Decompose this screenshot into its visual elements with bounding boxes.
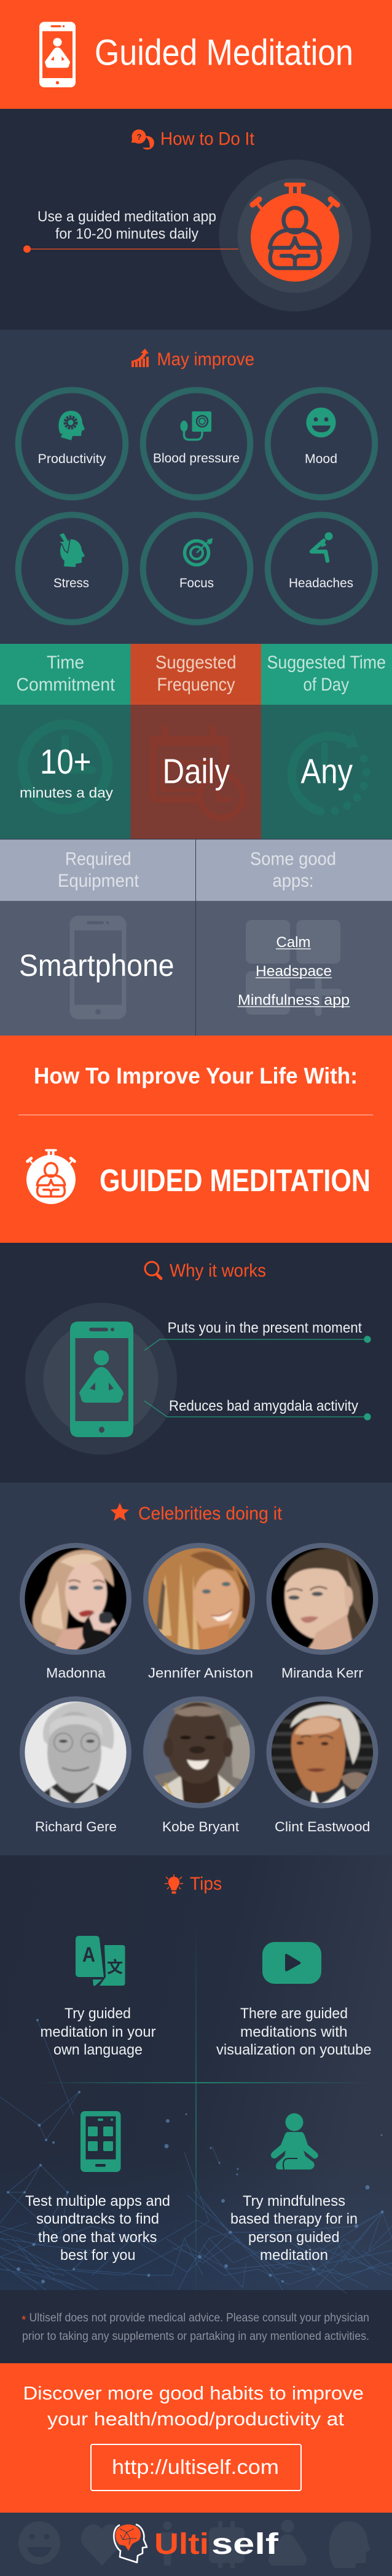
tip: test apps: Test multiple apps and	[25, 2193, 170, 2209]
icon: star	[111, 1503, 129, 1521]
title: Guided Meditation	[95, 32, 353, 73]
callout: amygdala: Reduces bad amygdala activity	[169, 1398, 358, 1414]
tip: youtube: meditations with	[240, 2024, 348, 2040]
heading: suggested time of day: of Day	[304, 675, 349, 695]
tip: own language	[41, 1936, 156, 2058]
benefit: stress: Stress	[53, 576, 89, 590]
icon: faint phone	[70, 916, 127, 1020]
app links: Calm	[276, 934, 311, 951]
callout: present moment	[144, 1320, 371, 1350]
portrait: Miranda Kerr	[267, 1543, 378, 1655]
cta text: your health/mood/productivity at	[47, 2408, 344, 2430]
panel: suggested time of day	[261, 644, 392, 839]
benefit: blood pressure: Blood pressure	[153, 451, 240, 466]
value: daily: Daily	[162, 751, 230, 791]
heading: may improve: May improve	[157, 349, 254, 370]
callout: present moment: Puts you in the present moment	[168, 1320, 362, 1336]
celebrity names: Clint Eastwood	[275, 1819, 370, 1834]
benefit: mood	[268, 390, 375, 497]
tip: youtube: There are guided	[240, 2005, 348, 2022]
icon: rising chart	[131, 349, 149, 367]
header banner	[0, 0, 392, 109]
tip: test apps	[25, 2111, 170, 2264]
celebrity names: Richard Gere	[35, 1819, 117, 1834]
starfield network background	[0, 2020, 392, 2294]
heading: some good apps: apps:	[273, 871, 313, 891]
instruction text: for 10-20 minutes daily	[55, 226, 198, 242]
tip: youtube	[216, 1942, 371, 2058]
value: smartphone: Smartphone	[19, 948, 174, 983]
value: 10+: 10+	[40, 742, 91, 782]
tip: in-person therapy: meditation	[260, 2247, 328, 2264]
heading: tips: Tips	[190, 1874, 222, 1894]
icon: faint app grid	[246, 920, 342, 1016]
tip: in-person therapy: Try mindfulness	[243, 2193, 345, 2209]
icon: question bubbles: ?	[136, 132, 141, 141]
url box	[91, 2444, 301, 2491]
concentric circles	[219, 160, 371, 311]
panel: tips	[0, 1855, 392, 2363]
disclaimer: Ultiself does not provide medical advice. Please consult your physician	[29, 2312, 369, 2324]
icon: head with gear	[58, 411, 85, 440]
icon: bulb	[165, 1874, 183, 1894]
panel: required equipment	[0, 839, 195, 1036]
benefit: mood: Mood	[305, 451, 337, 466]
logo: ultiself: Ulti	[154, 2528, 209, 2561]
instruction text	[37, 208, 216, 242]
heading: how to do it: How to Do It	[160, 129, 255, 149]
heading: time commitment	[16, 652, 116, 695]
icon: play button	[262, 1942, 321, 1984]
logo: ultiself: self	[211, 2528, 279, 2561]
benefit: headaches	[268, 515, 375, 622]
panel: footer	[0, 2513, 392, 2576]
panel: how to do it	[0, 109, 392, 330]
connector line with dot	[23, 245, 238, 253]
heading: required equipment: Required	[65, 849, 131, 870]
tip: in-person therapy: person guided	[248, 2229, 339, 2246]
icon: phone with apps	[80, 2111, 120, 2172]
icon: translate: A	[82, 1943, 95, 1967]
celebrity names	[35, 1665, 370, 1834]
banner heading: How To Improve Your Life With:	[34, 1063, 358, 1088]
tip: own language: meditation in your	[41, 2024, 156, 2040]
heading: suggested frequency: Suggested	[155, 652, 236, 673]
icon: faint circular arrow	[292, 732, 366, 811]
icon: translate: 文	[107, 1955, 123, 1978]
portrait: Richard Gere	[20, 1696, 131, 1808]
cta text: Discover more good habits to improve	[23, 2382, 364, 2404]
icon: meditating person	[271, 2113, 318, 2170]
panel: how to improve banner	[0, 1036, 392, 1243]
icon: blood pressure cuff	[181, 411, 211, 440]
disclaimer	[22, 2312, 369, 2343]
icon: phone with meditator	[70, 1322, 133, 1437]
benefit: focus: Focus	[179, 576, 214, 590]
heading: time commitment: Commitment	[16, 675, 116, 695]
tip: test apps: the one that works	[38, 2229, 157, 2246]
benefit: productivity: Productivity	[38, 451, 106, 466]
instruction text: Use a guided meditation app	[37, 208, 216, 225]
app links: Headspace	[256, 963, 332, 980]
heading: required equipment: Equipment	[58, 871, 139, 891]
heading: suggested frequency: Frequency	[157, 675, 235, 695]
panel: why it works	[0, 1243, 392, 1483]
panel: suggested frequency	[130, 644, 261, 839]
panel: call to action	[0, 2363, 392, 2513]
tip: youtube: visualization on youtube	[216, 2042, 371, 2058]
caption: minutes a day: minutes a day	[20, 785, 114, 801]
app links	[237, 934, 350, 1009]
icon: stopwatch meditator	[251, 183, 339, 282]
benefit: headaches: Headaches	[289, 576, 353, 590]
panel: some good apps	[195, 839, 392, 1036]
benefit: productivity	[18, 390, 125, 497]
icon: faint clock	[23, 724, 108, 809]
faint background icons	[18, 2520, 370, 2568]
icon: head with lightning	[58, 533, 85, 567]
icon: smiley	[306, 408, 335, 437]
portrait: Jennifer Aniston	[143, 1543, 255, 1655]
logo: ultiself	[114, 2524, 279, 2562]
benefit: stress	[18, 515, 125, 622]
cta text	[23, 2382, 364, 2430]
heading: why it works: Why it works	[170, 1261, 266, 1281]
celebrity names: Madonna	[46, 1665, 106, 1681]
portrait: Kobe Bryant	[143, 1696, 255, 1808]
icon: translate	[76, 1936, 125, 1986]
panel: time commitment	[0, 644, 130, 839]
tip: in-person therapy	[230, 2113, 358, 2264]
concentric circles	[25, 1302, 177, 1455]
icon: person holding head	[312, 533, 333, 561]
tip: test apps: soundtracks to find	[36, 2211, 159, 2227]
icon: faint calendar and clock	[150, 727, 243, 818]
benefit: blood pressure	[143, 390, 250, 497]
portrait: Madonna	[20, 1543, 131, 1655]
heading: required equipment	[58, 849, 139, 891]
benefit: focus	[143, 515, 250, 622]
heading: some good apps: Some good	[250, 849, 336, 870]
icon: white stopwatch	[26, 1149, 76, 1204]
heading: suggested frequency	[155, 652, 236, 695]
icon: phone with meditator	[39, 22, 76, 87]
tip: in-person therapy: based therapy for in	[230, 2211, 358, 2227]
callout: amygdala	[144, 1398, 371, 1421]
celebrity names: Jennifer Aniston	[148, 1665, 253, 1681]
value: any: Any	[301, 751, 353, 791]
icon: magnifier	[145, 1262, 161, 1278]
panel: may improve	[0, 330, 392, 644]
heading: celebrities: Celebrities doing it	[138, 1504, 283, 1524]
portrait: Clint Eastwood	[267, 1696, 378, 1808]
network nodes	[7, 2019, 383, 2283]
heading: time commitment: Time	[47, 652, 84, 673]
celebrity names: Miranda Kerr	[281, 1665, 364, 1681]
url box: http://ultiself.com	[112, 2455, 279, 2478]
tip: own language: Try guided	[65, 2005, 131, 2022]
heading: some good apps	[250, 849, 336, 891]
disclaimer: *	[22, 2314, 26, 2327]
icon: target	[184, 538, 213, 565]
app links: Mindfulness app	[238, 992, 350, 1009]
celebrity names: Kobe Bryant	[162, 1819, 240, 1834]
heading: suggested time of day	[267, 652, 386, 695]
panel: celebrities	[0, 1483, 392, 1855]
icon: question bubbles	[131, 129, 154, 149]
tip: own language: own language	[53, 2042, 143, 2058]
tip: test apps: best for you	[60, 2247, 135, 2264]
disclaimer: prior to taking any supplements or partaking in any mentioned activities.	[22, 2330, 369, 2343]
